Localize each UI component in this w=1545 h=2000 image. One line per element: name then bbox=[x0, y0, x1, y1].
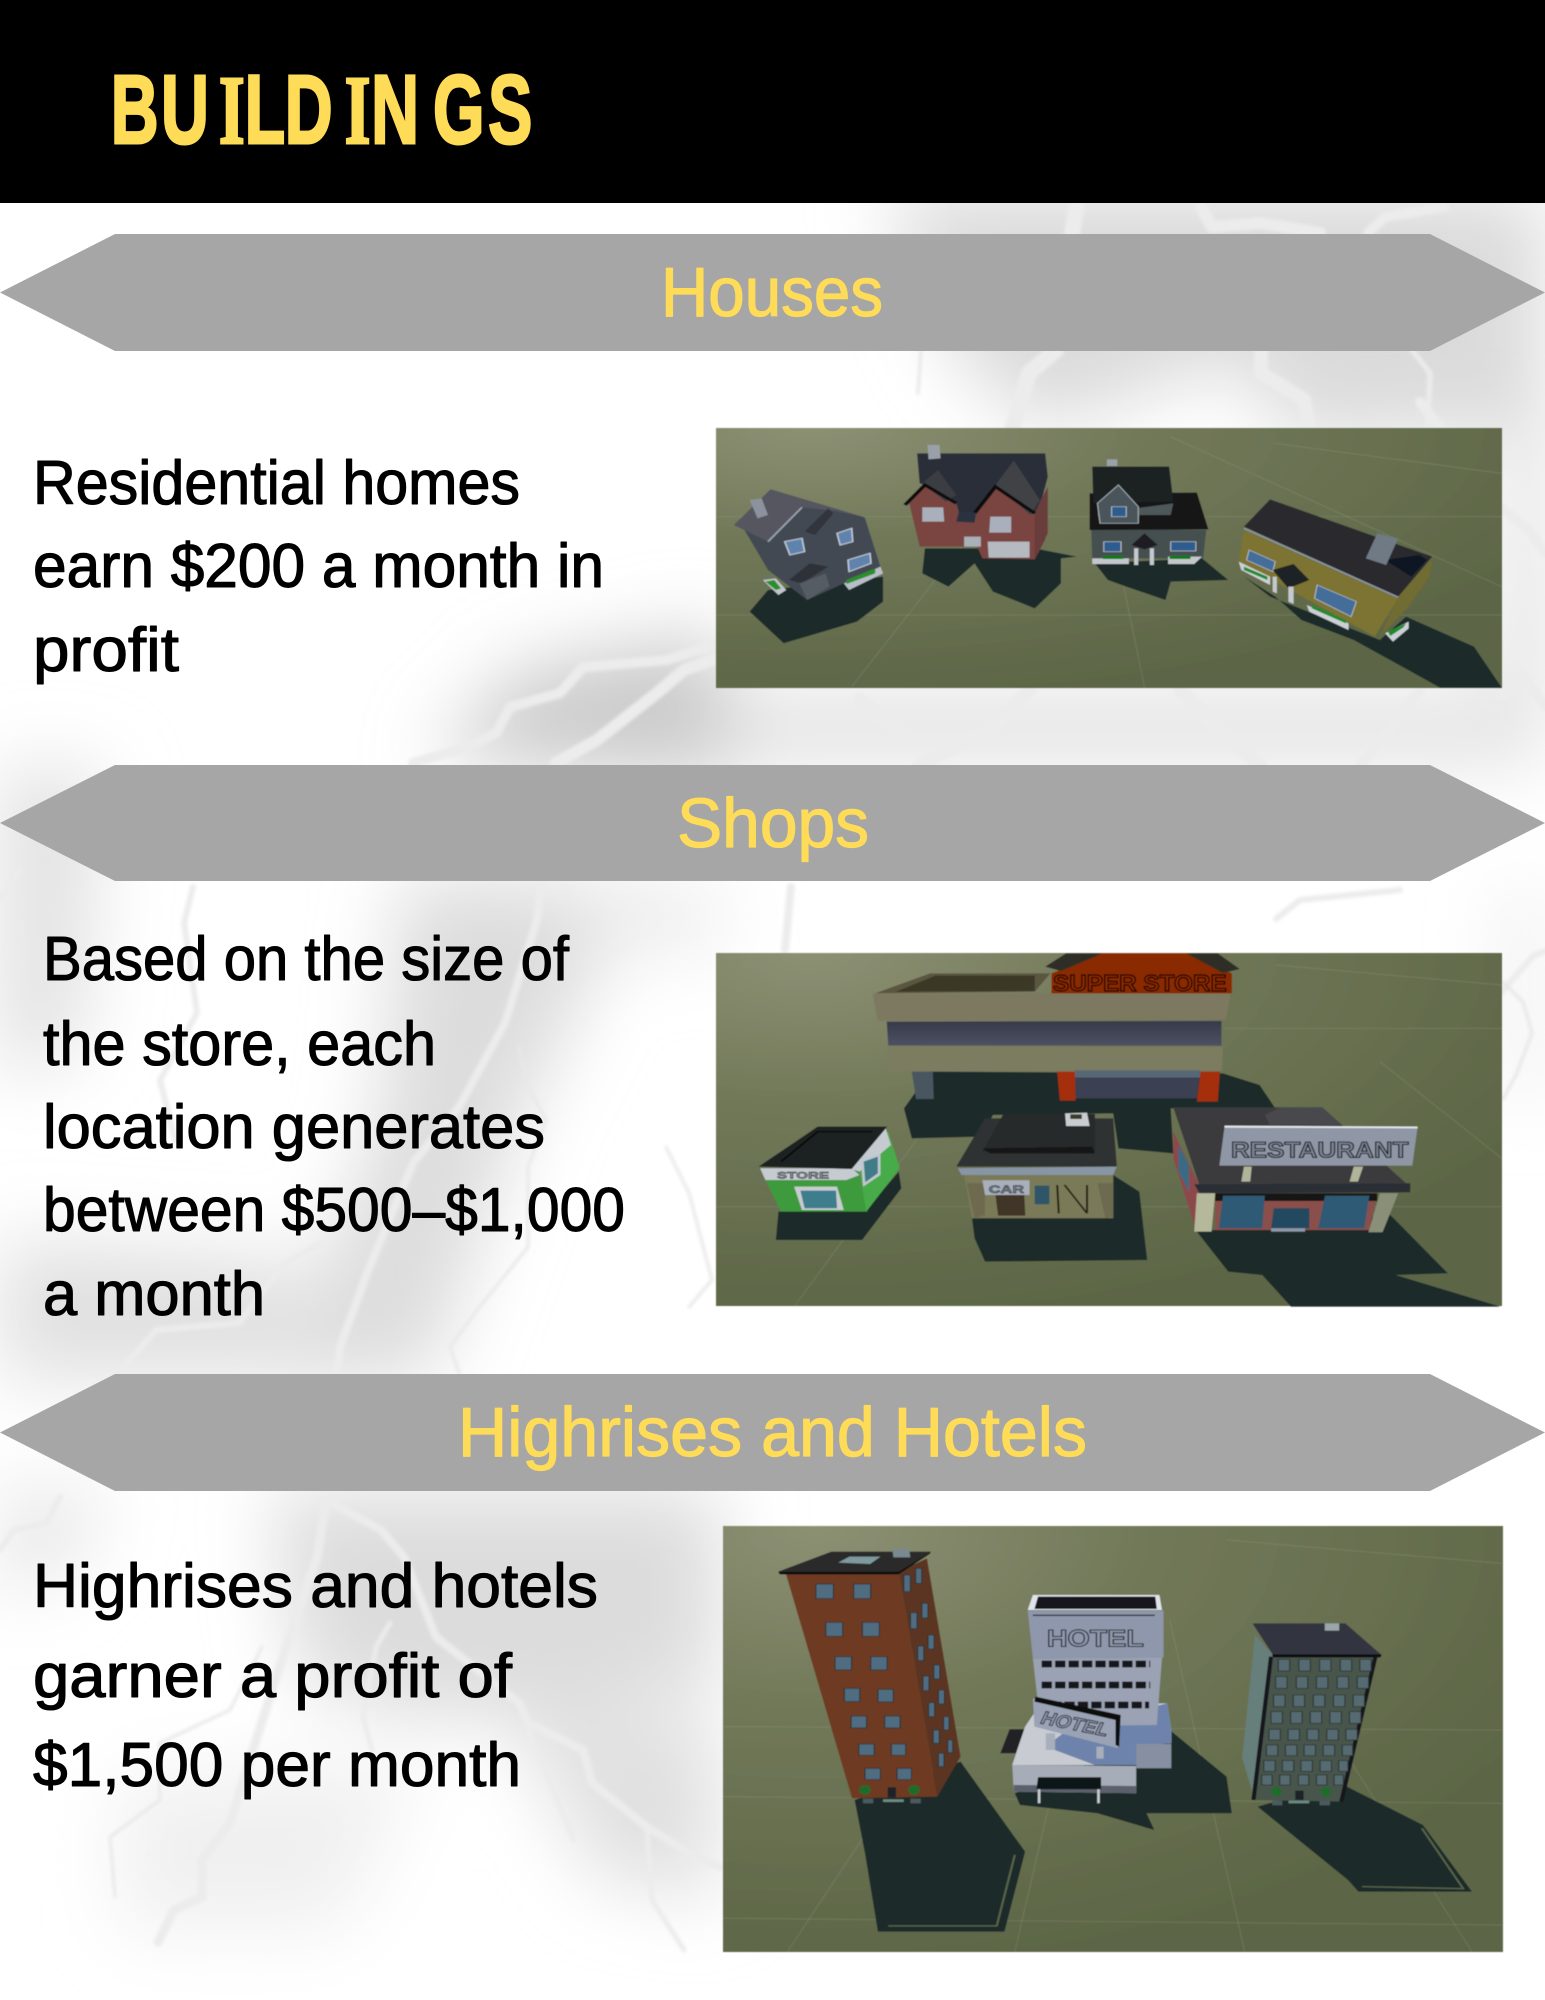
title bbox=[111, 55, 532, 164]
header bar bbox=[0, 0, 1545, 203]
building: car shop bbox=[956, 1113, 1117, 1218]
title: I bbox=[345, 56, 370, 164]
title: I bbox=[219, 56, 245, 164]
text block: houses description: earn $200 a month in bbox=[33, 532, 604, 601]
house: red brick bbox=[905, 445, 1048, 559]
building: grey-green highrise bbox=[1242, 1623, 1382, 1805]
shadows bbox=[750, 548, 1502, 688]
text block: houses description bbox=[33, 449, 604, 685]
shadows bbox=[855, 1730, 1472, 1932]
building: brick highrise bbox=[778, 1548, 961, 1803]
panel: houses render bbox=[716, 428, 1502, 688]
building: green store bbox=[759, 1127, 900, 1212]
text block: shops description: between $500–$1,000 bbox=[43, 1176, 625, 1245]
title: L bbox=[245, 55, 285, 164]
title: B bbox=[111, 55, 158, 164]
text block: shops description: a month bbox=[43, 1260, 265, 1329]
sign: super store: SUPER STORE bbox=[1053, 971, 1227, 996]
text block: highrises description bbox=[33, 1552, 598, 1800]
building: hotel bbox=[1000, 1595, 1171, 1803]
sign: store: STORE bbox=[777, 1170, 829, 1181]
text block: shops description: location generates bbox=[43, 1093, 545, 1162]
text block: houses description: Residential homes bbox=[33, 449, 520, 518]
text block: shops description: Based on the size of bbox=[43, 925, 570, 994]
text block: shops description bbox=[43, 925, 625, 1329]
building: super store bbox=[873, 953, 1240, 1102]
text block: highrises description: Highrises and hotels bbox=[33, 1552, 598, 1621]
title: G bbox=[433, 55, 484, 164]
text block: houses description: profit bbox=[33, 616, 179, 685]
sign: car: CAR bbox=[989, 1184, 1025, 1196]
text block: highrises description: garner a profit of bbox=[33, 1642, 513, 1711]
title: S bbox=[488, 55, 532, 164]
section banner: Shops: Shops bbox=[677, 784, 869, 862]
sign: hotel tower: HOTEL bbox=[1047, 1625, 1144, 1652]
title: D bbox=[285, 55, 333, 164]
panel: highrises render bbox=[723, 1526, 1503, 1952]
text block: highrises description: $1,500 per month bbox=[33, 1731, 521, 1800]
house: grey with dark roof bbox=[1090, 459, 1208, 565]
title: U bbox=[161, 55, 209, 164]
building: restaurant bbox=[1173, 1107, 1418, 1232]
sign: restaurant: RESTAURANT bbox=[1231, 1139, 1409, 1163]
text block: shops description: the store, each bbox=[43, 1010, 436, 1079]
section banner: Highrises and Hotels: Highrises and Hotels bbox=[458, 1393, 1087, 1471]
panel: shops render bbox=[716, 953, 1502, 1307]
section banner: Houses: Houses bbox=[661, 253, 883, 331]
section banner: Houses bbox=[0, 234, 1545, 351]
section banner: Shops bbox=[0, 765, 1545, 881]
shadows bbox=[776, 1072, 1500, 1307]
house: slate grey bbox=[734, 489, 883, 600]
house: yellow bbox=[1239, 499, 1432, 642]
section banner: Highrises and Hotels bbox=[0, 1374, 1545, 1491]
sign: hotel billboard: HOTEL bbox=[1037, 1708, 1113, 1740]
title: N bbox=[371, 55, 419, 164]
